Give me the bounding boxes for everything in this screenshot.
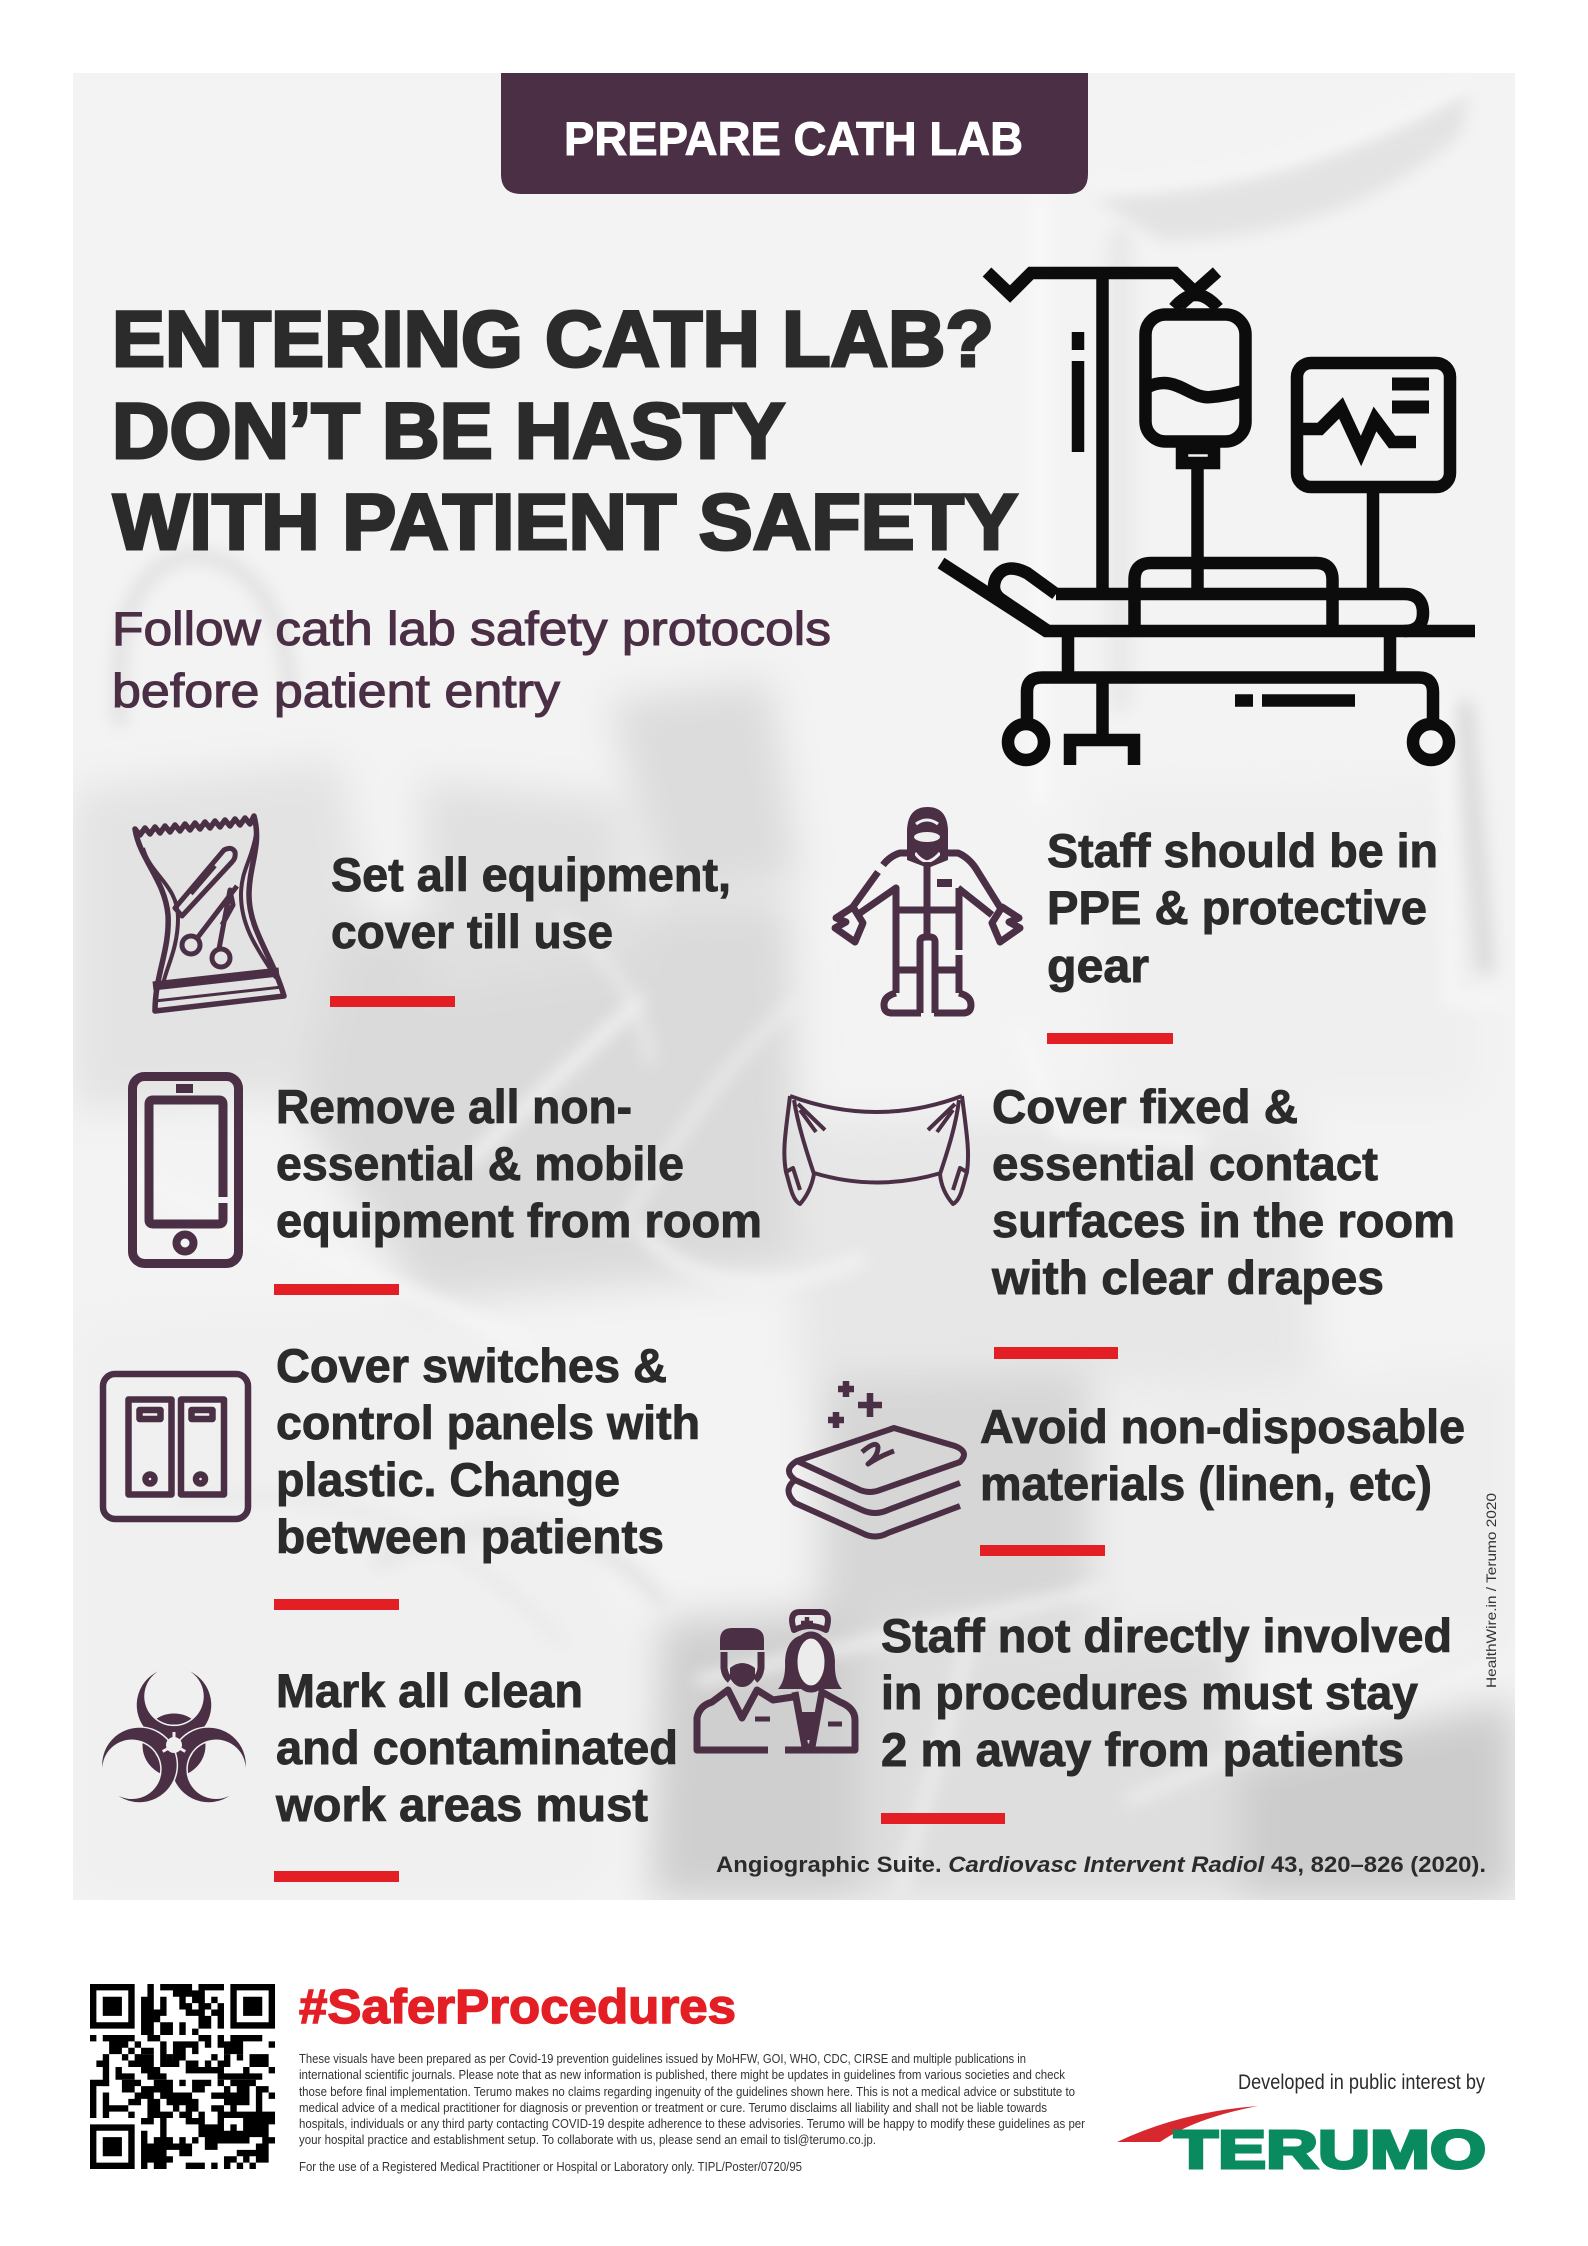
text: cover fixed surfaces: Cover fixed & <box>992 1080 1298 1133</box>
disclaimer text: international scientific journals. Please note that as new information is published, there might be updates in guidelines from various societies and check <box>299 2067 1065 2082</box>
citation: Angiographic Suite. Cardiovasc Intervent Radiol 43, 820–826 (2020). <box>716 1852 1486 1877</box>
text: staff not involved: 2 m away from patients <box>881 1723 1404 1776</box>
text: set all equipment <box>331 848 731 958</box>
text: mark clean areas: and contaminated <box>276 1721 678 1774</box>
panel: blurred greyscale cath lab photo background <box>73 73 1515 1900</box>
text: staff not involved <box>881 1609 1452 1776</box>
text: remove non-essential <box>276 1080 762 1247</box>
text: cover fixed surfaces <box>991 1080 1455 1304</box>
text: remove non-essential: essential & mobile <box>276 1137 684 1190</box>
icon: folded linen stack <box>788 1381 964 1536</box>
text: staff not involved: Staff not directly involved <box>881 1609 1452 1662</box>
text: cover fixed surfaces: with clear drapes <box>991 1251 1384 1304</box>
heading: Entering cath lab: DON’T BE HASTY <box>112 386 785 475</box>
disclaimer text: These visuals have been prepared as per Covid-19 prevention guidelines issued by MoHFW, GOI, WHO, CDC, CIRSE and multiple publications in <box>299 2051 1026 2066</box>
subtitle: before patient entry <box>112 664 561 717</box>
text: cover switches <box>276 1339 700 1563</box>
heading: Entering cath lab <box>112 294 1018 566</box>
subtitle: Follow cath lab safety protocols <box>112 602 831 655</box>
text: set all equipment: cover till use <box>331 905 613 958</box>
item: remove non-essential equipment <box>132 1076 762 1295</box>
heading: Entering cath lab: WITH PATIENT SAFETY <box>113 477 1018 566</box>
item: set all equipment <box>135 816 731 1011</box>
hashtag: SaferProcedures: #SaferProcedures <box>299 1981 736 2034</box>
item: cover switches <box>103 1339 700 1610</box>
subtitle <box>112 602 831 717</box>
icon: biohazard symbol <box>89 1669 259 1816</box>
item: staff in PPE <box>835 807 1438 1044</box>
item: mark clean and contaminated areas <box>89 1664 678 1882</box>
text: staff in PPE: gear <box>1047 939 1149 992</box>
icon: hospital bed with IV drip and monitor <box>941 272 1475 765</box>
text: avoid non-disposable <box>980 1400 1465 1510</box>
disclaimer text <box>299 2051 1086 2174</box>
icon: mobile phone <box>132 1076 238 1264</box>
tab: Prepare Cath Lab: PREPARE CATH LAB <box>564 112 1023 165</box>
text: mark clean areas: Mark all clean <box>276 1664 583 1717</box>
disclaimer text: For the use of a Registered Medical Practitioner or Hospital or Laboratory only. TIPL/Poster/0720/95 <box>299 2159 802 2174</box>
text: cover fixed surfaces: essential contact <box>992 1137 1378 1190</box>
item: avoid non-disposable materials <box>788 1381 1465 1556</box>
credit: vertical text: HealthWire.in / Terumo 2020 <box>1483 1493 1499 1688</box>
text: staff not involved: in procedures must stay <box>881 1666 1418 1719</box>
icon: wall switch panel <box>103 1374 248 1519</box>
logo: Terumo: TERUMO <box>1174 2120 1486 2180</box>
text: set all equipment: Set all equipment, <box>331 848 731 901</box>
text: cover switches: control panels with <box>276 1396 700 1449</box>
text: cover switches: Cover switches & <box>276 1339 667 1392</box>
disclaimer text: medical advice of a medical practitioner for diagnosis or prevention or treatment or cure. Terumo disclaims all liability and shall not be liable towards <box>299 2100 1047 2115</box>
item: staff not involved stay away <box>697 1609 1452 1824</box>
disclaimer text: hospitals, individuals or any third party contacting COVID-19 despite adherence to these advisories. Terumo will be happy to modify these guidelines as per <box>299 2116 1086 2131</box>
text: mark clean areas <box>275 1664 678 1831</box>
text: avoid non-disposable: Avoid non-disposable <box>980 1400 1465 1453</box>
text: staff in PPE <box>1047 824 1438 992</box>
icon: clear drape held at corners <box>784 1096 968 1204</box>
icon: person in protective suit <box>835 807 1020 1013</box>
text: staff in PPE: PPE & protective <box>1047 881 1427 934</box>
text: cover switches: plastic. Change <box>276 1453 620 1506</box>
disclaimer text: your hospital practice and establishment setup. To collaborate with us, please send an email to tisl@terumo.co.jp. <box>299 2132 876 2147</box>
text: remove non-essential: equipment from room <box>276 1194 762 1247</box>
text: staff in PPE: Staff should be in <box>1047 824 1438 877</box>
text: remove non-essential: Remove all non- <box>276 1080 632 1133</box>
item: cover contact surfaces <box>784 1080 1455 1359</box>
tab: Prepare Cath Lab <box>501 73 1088 194</box>
text: cover switches: between patients <box>276 1510 664 1563</box>
icon: masked doctor and nurse <box>697 1612 855 1750</box>
text: mark clean areas: work areas must <box>275 1778 648 1831</box>
text: avoid non-disposable: materials (linen, etc) <box>980 1457 1432 1510</box>
developed by note: Developed in public interest by <box>1238 2071 1485 2094</box>
text: cover fixed surfaces: surfaces in the room <box>992 1194 1455 1247</box>
disclaimer text: those before final implementation. Terumo makes no claims regarding ingenuity of the guidelines shown here. This is not a medical advice or substitute to <box>299 2084 1075 2099</box>
QR code <box>90 1984 275 2169</box>
logo: Terumo <box>1117 2106 1486 2180</box>
icon: sterile pouch with instruments <box>135 816 284 1011</box>
heading: Entering cath lab: ENTERING CATH LAB? <box>112 294 994 383</box>
